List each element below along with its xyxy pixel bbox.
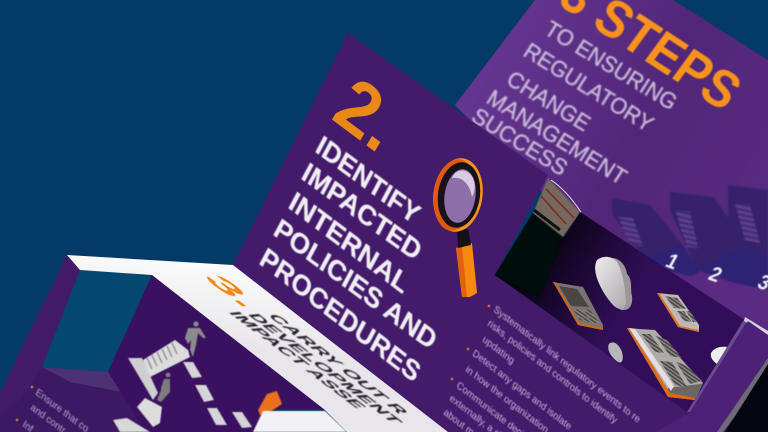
panel: step 3 card left frame [0, 255, 150, 432]
icon: document right [657, 293, 699, 332]
heading: carry out and develop impact assessment: DEVELOPMENT [243, 313, 406, 424]
icon: three stepped servers [612, 185, 768, 290]
step squares [183, 362, 202, 378]
heading number: 2.: 2. [322, 60, 413, 168]
bullet list: step 2 actions: risks, policies and controls to identify [486, 318, 619, 427]
heading: identify impacted internal policies and procedures: POLICIES AND [269, 212, 442, 356]
icon: staircase and figures [113, 321, 282, 432]
bullet list: step 2 actions: Systematically link regulatory events to re [492, 304, 642, 426]
heading: identify impacted internal policies and procedures: IDENTIFY [311, 129, 425, 230]
icon: magnifying glass [429, 155, 487, 297]
subtitle: to ensuring regulatory change management success: TO ENSURING [540, 16, 682, 115]
panel: step 2 front card [233, 33, 768, 432]
icon: large cloud [595, 257, 632, 310]
heading number: 3.: 3. [196, 273, 269, 310]
taupe page fold [533, 178, 581, 237]
panel: window with book illustration [495, 178, 768, 412]
bullet list: step 2 actions: Detect any gaps and isolate [471, 348, 573, 432]
icon: document left [553, 282, 603, 330]
subtitle: to ensuring regulatory change management success: CHANGE [502, 66, 595, 136]
panel: right frame and dark opening [656, 321, 768, 432]
panel: step 3 inner illustration [16, 275, 325, 432]
heading: identify impacted internal policies and procedures: INTERNAL [284, 186, 414, 299]
window: blue opening [42, 270, 152, 372]
figure lower [157, 373, 170, 402]
icon: partial cloud [711, 347, 727, 365]
icon: document bottom [627, 328, 703, 400]
black shadow wall [495, 213, 563, 297]
heading: identify impacted internal policies and procedures: PROCEDURES [255, 241, 426, 388]
subtitle: to ensuring regulatory change management success: SUCCESS [467, 103, 572, 181]
icon: small cloud [608, 342, 623, 363]
subtitle: to ensuring regulatory change management success: REGULATORY [519, 38, 658, 137]
floor [0, 367, 150, 432]
window frame edge [687, 318, 748, 412]
step numbers: 1 [661, 250, 683, 274]
heading: carry out and develop impact assessment: IMPACT ASSE [224, 311, 370, 409]
subtitle: to ensuring regulatory change management success [467, 16, 682, 190]
white frame top [744, 317, 768, 335]
panel: white lower flap [253, 411, 347, 432]
figure upper [185, 321, 206, 357]
heading: carry out and develop impact assessment: CARRY OUT R [263, 314, 412, 415]
step numbers: 2 [704, 263, 726, 287]
subtitle: to ensuring regulatory change management success: MANAGEMENT [482, 85, 632, 190]
orange figure [258, 391, 282, 415]
step numbers [661, 250, 768, 295]
bullet list: step 2 actions: updating [481, 334, 516, 367]
panel: white title strip [67, 255, 448, 432]
heading: identify impacted internal policies and procedures: IMPACTED [297, 156, 427, 267]
heading: identify impacted internal policies and procedures [255, 129, 442, 388]
panel: back cover with title [455, 0, 768, 340]
